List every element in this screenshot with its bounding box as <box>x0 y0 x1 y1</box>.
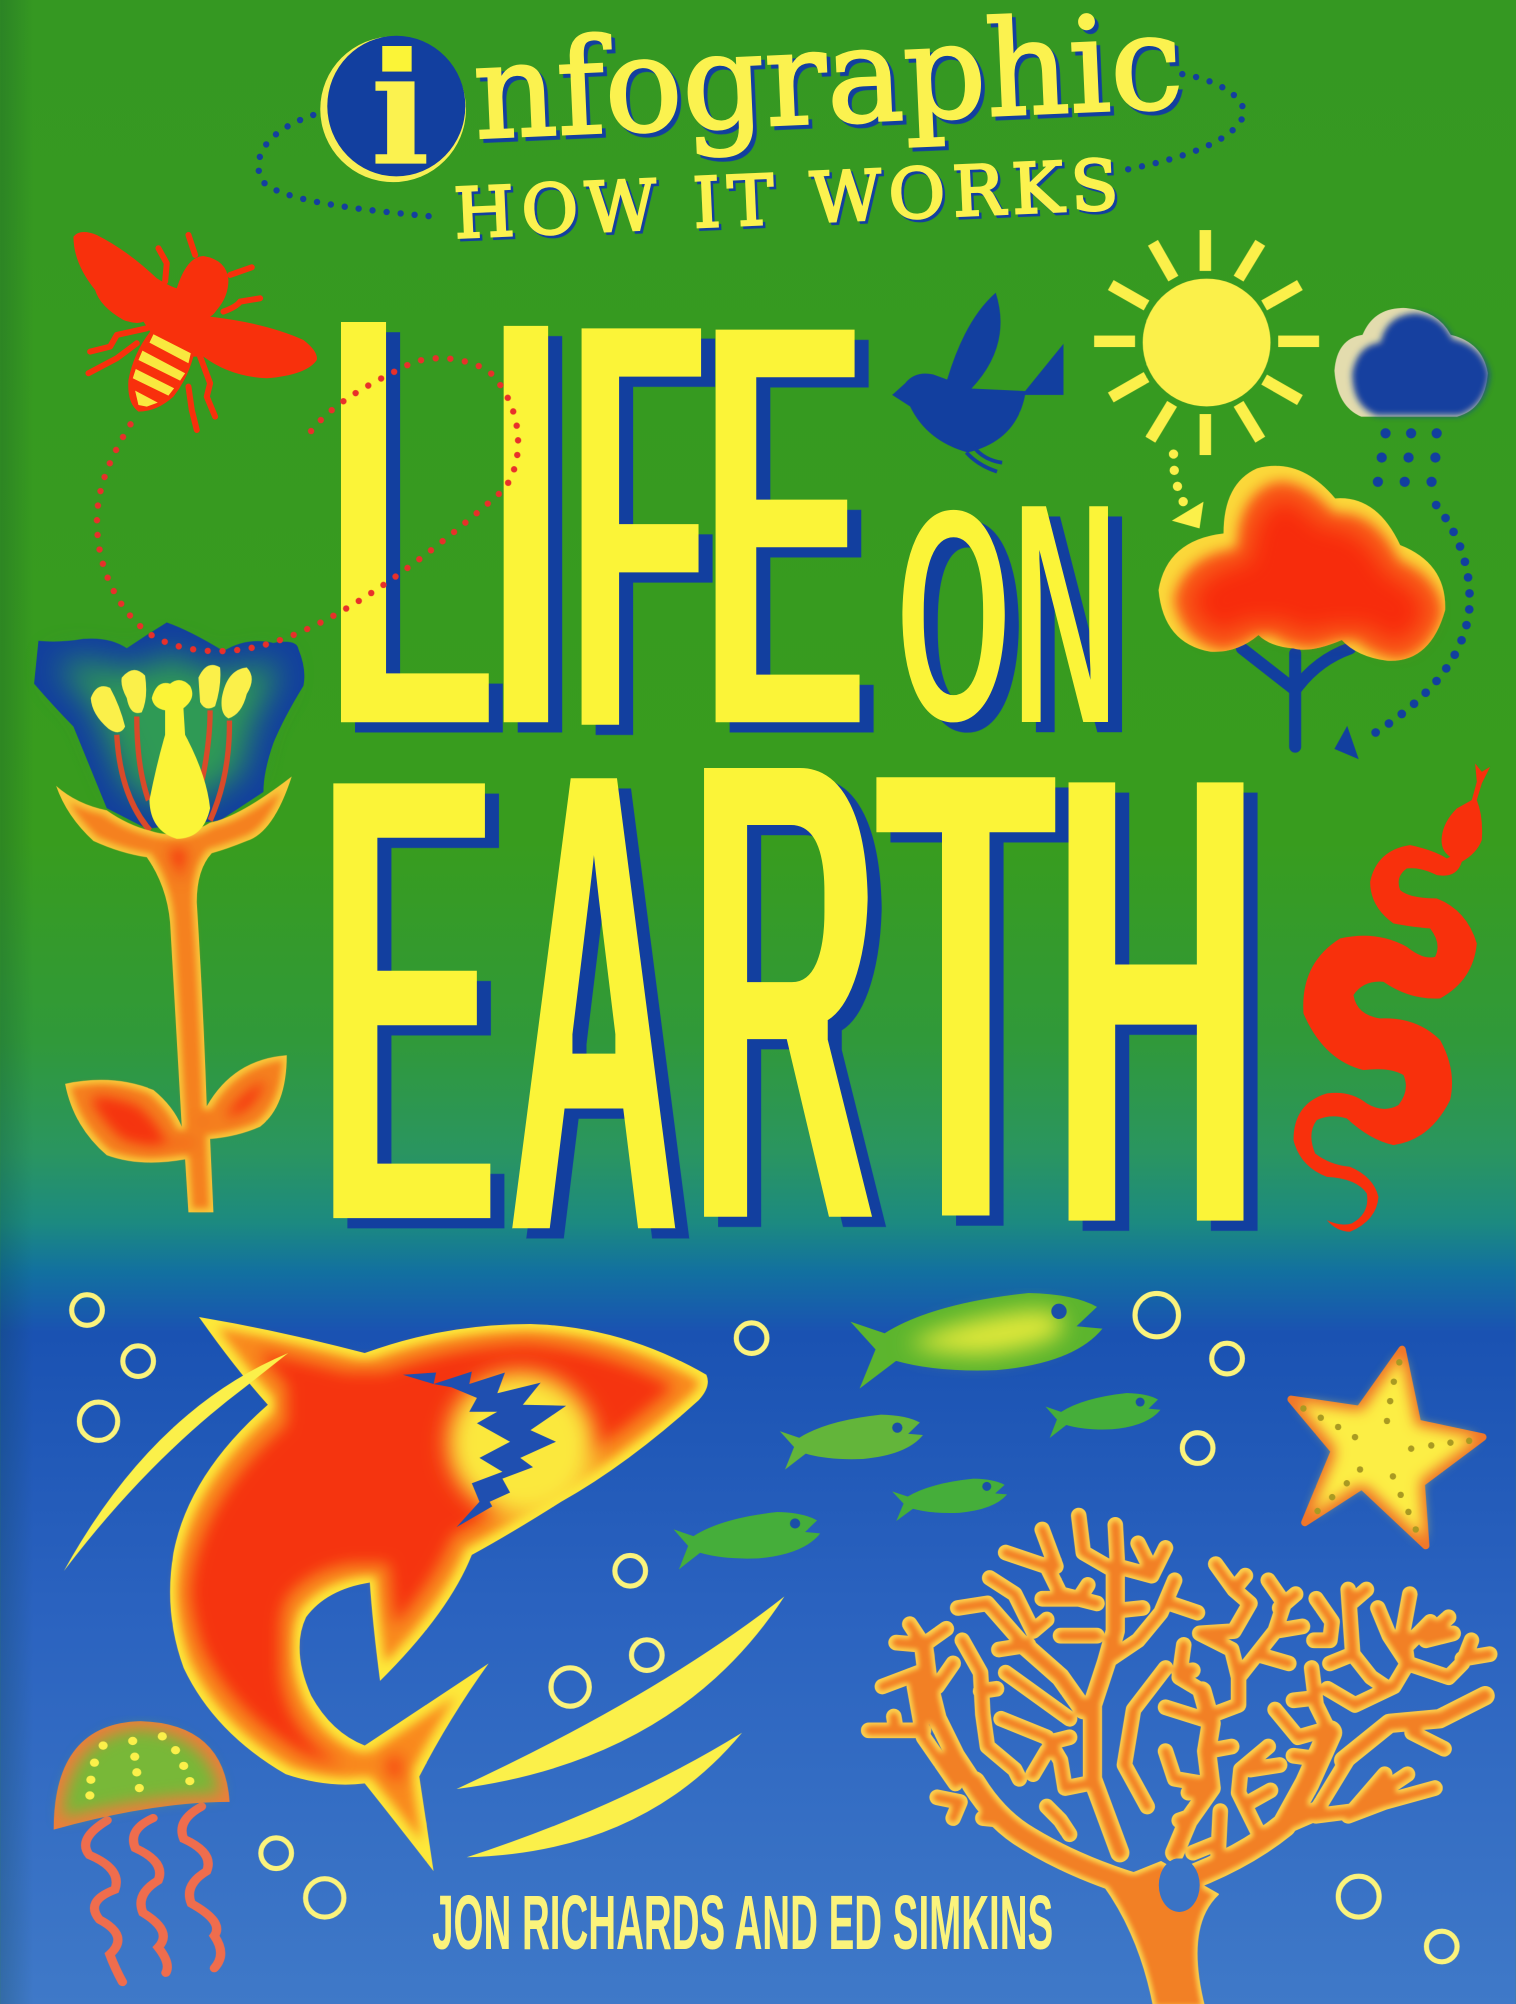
yellow jaw highlight <box>431 1355 611 1526</box>
stamens <box>91 665 252 732</box>
icon: small fish 2 <box>1045 1393 1160 1438</box>
title line: life: E <box>702 192 867 860</box>
petals <box>34 623 304 829</box>
icon: bee <box>73 232 317 430</box>
bee body and wings <box>73 232 317 412</box>
arrow: water to tree <box>1334 505 1470 759</box>
pistil <box>149 680 210 839</box>
motion swooshes <box>64 1353 784 1857</box>
icon: coral <box>869 1516 1490 2004</box>
icon: jellyfish <box>54 1721 230 1982</box>
bubbles <box>72 1293 1457 1962</box>
title line: earth: E <box>318 631 498 1368</box>
title line: on: O <box>896 441 1011 790</box>
title line: life: L <box>325 181 495 862</box>
icon: small fish 1 <box>780 1415 923 1470</box>
icon: sun <box>1094 230 1319 455</box>
dotted bee flight path <box>97 358 518 651</box>
title line: earth: H <box>1052 628 1260 1371</box>
icon: shark <box>170 1317 708 1871</box>
icon: i badge: i <box>370 16 430 202</box>
filaments <box>117 710 229 831</box>
coral trunk gap <box>1159 1858 1200 1912</box>
icon: tree <box>1159 466 1445 747</box>
dotted orbit ring <box>258 74 1244 217</box>
shark body <box>170 1317 708 1871</box>
icon: small fish 4 <box>673 1512 820 1569</box>
title line: earth: A <box>506 622 682 1383</box>
bee stripes <box>133 334 191 407</box>
right middle twigs <box>1165 1564 1302 1719</box>
title line: on: N <box>1012 433 1118 796</box>
left cluster twigs <box>869 1624 955 1783</box>
dome <box>54 1721 230 1830</box>
arrow: sunlight to tree <box>1172 454 1204 528</box>
title line: earth: R <box>689 612 880 1371</box>
title line: life <box>325 181 867 863</box>
icon: rain cloud <box>1334 308 1489 482</box>
icon: flower <box>34 623 304 1212</box>
title line: earth <box>318 612 1260 1383</box>
dome dots <box>85 1732 194 1800</box>
series subtitle: HOW IT WORKS <box>452 146 1120 255</box>
icon: large fish <box>850 1293 1102 1389</box>
icon: small fish 3 <box>892 1479 1007 1521</box>
title line: earth: T <box>876 623 1056 1366</box>
title line: on <box>896 433 1118 796</box>
icon: i badge <box>320 36 466 182</box>
sepals, stem and leaves <box>56 776 292 1212</box>
series logo <box>258 0 1244 255</box>
title: life on earth <box>318 181 1260 1383</box>
icon: snake <box>1293 763 1490 1232</box>
shark mouth <box>403 1372 566 1527</box>
bee legs <box>88 235 260 430</box>
icon: bird <box>892 293 1063 472</box>
center cluster twigs <box>1006 1516 1197 1659</box>
right cluster twigs <box>1314 1589 1490 1705</box>
title line: life: F <box>569 187 707 863</box>
tentacles <box>86 1807 221 1982</box>
icon: starfish <box>1291 1349 1483 1546</box>
title line: life: I <box>488 187 564 860</box>
